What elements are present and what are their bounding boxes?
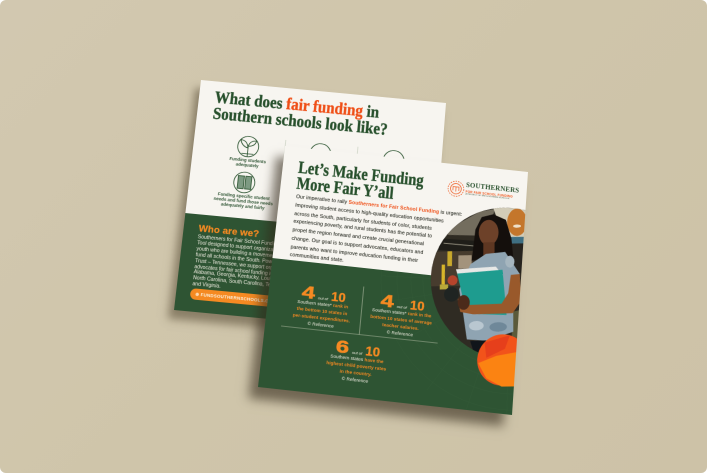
caption: funding specific student needs: Funding specific student: [218, 191, 270, 201]
intro paragraph: Our imperative to rally Southerners for Fair School Funding is urgent:: [296, 194, 462, 218]
description: [326, 353, 386, 384]
button: website link: ⊕ FUNDSOUTHERNSCHOOLS.ORG: [195, 292, 276, 304]
green lower section: [258, 258, 521, 415]
stat: 4 out of 10 expenditures: [292, 282, 350, 328]
description: per-student expenditures.: [293, 312, 350, 323]
number: [335, 336, 381, 360]
text: who are we body: fund all schools in the South. Power: [195, 252, 277, 265]
text: who are we body: [192, 234, 282, 290]
number: 6: [335, 336, 350, 357]
papers: [456, 266, 501, 276]
chart-like pattern, photo and orange circle: [281, 180, 526, 387]
intro paragraph: across the South, particularly for students of color, students: [294, 211, 432, 231]
panel: back card: [174, 80, 446, 334]
stat: 4 out of 10 salaries: [370, 290, 432, 337]
description: [292, 299, 350, 328]
folder: [457, 270, 507, 316]
description: in the country.: [339, 368, 372, 377]
number: out of: [352, 350, 362, 356]
description: © Reference: [307, 321, 334, 328]
caption: funding specific student needs: adequately and fairly: [221, 201, 265, 210]
caption: funding students adequately: adequately: [236, 161, 259, 168]
number: 10: [365, 343, 381, 360]
trousers: [470, 340, 486, 352]
icon: seedling: [237, 136, 260, 158]
number: out of: [318, 295, 328, 301]
heading: what does fair funding look like: What does fair funding in: [214, 87, 380, 122]
description: Southern states have the: [330, 353, 384, 364]
panel: front card: [258, 146, 528, 415]
text: who are we body: and Virginia.: [192, 281, 221, 290]
number: [301, 282, 346, 305]
face: [479, 220, 499, 245]
number: 10: [331, 289, 346, 305]
intro paragraph: [289, 194, 462, 264]
number: 10: [409, 298, 425, 314]
intro paragraph: change. Our goal is to support advocates, educators and: [291, 236, 424, 256]
intro paragraph: communities and state.: [289, 252, 344, 264]
number: [380, 290, 425, 314]
icon: documents: [233, 171, 256, 194]
description: teacher salaries.: [382, 322, 419, 331]
caption: funding specific student needs: [213, 191, 273, 210]
intro paragraph: parents who want to improve education funding in their: [290, 244, 418, 264]
heading: who are we: Who are we?: [198, 223, 260, 240]
stat: 6 out of 10 poverty: [326, 336, 386, 384]
hair: [472, 214, 513, 261]
intro paragraph: Improving student access to high-quality education opportunities: [295, 203, 444, 224]
text: who are we body: North Carolina, South Carolina, Tenn: [193, 275, 277, 289]
intro paragraph: experiencing poverty, and rural students has the potential to: [293, 219, 432, 240]
logo wordmark: A PROJECT OF THE SOUTHERN SCHOOLS: [465, 193, 509, 200]
description: Southern states* rank in the: [372, 307, 432, 319]
text: who are we body: advocates for fair school funding in: [194, 264, 273, 277]
description: the bottom 10 states in: [297, 306, 348, 316]
heading: let's make funding: More Fair Y’all: [296, 174, 394, 203]
description: highest child poverty rates: [326, 360, 386, 372]
text: who are we body: youth who are building a movement: [196, 246, 277, 259]
description: Southern states* rank in: [297, 299, 348, 309]
logo wordmark: [465, 182, 519, 200]
arm: [458, 274, 521, 315]
heading: what does fair funding look like: [212, 87, 388, 139]
text: who are we body: Southerners for Fair School Funding: [197, 234, 280, 248]
description: [370, 307, 432, 337]
caption: funding specific student needs: needs and fund those needs: [213, 196, 273, 206]
text: who are we body: Trust – Tennessee, we support organ: [195, 258, 279, 272]
logo wordmark: SOUTHERNERS: [466, 182, 519, 195]
icon: third funding icon: [382, 150, 405, 172]
number: out of: [397, 304, 407, 310]
caption: funding students adequately: Funding students: [229, 156, 266, 164]
intro paragraph: propel the region forward and create crucial generational: [292, 227, 424, 247]
logo emblem: [448, 180, 464, 197]
description: © Reference: [342, 376, 368, 384]
photo: student holding folder: [430, 208, 526, 352]
row dividers and icons: [233, 136, 404, 194]
caption: funding students adequately: [229, 156, 266, 168]
divider lines: [281, 278, 441, 343]
icon: second funding icon: [309, 143, 332, 165]
text: who are we body: Alabama, Georgia, Kentucky, Louisian: [193, 270, 280, 284]
text: who are we body: Tool designed to support organization: [197, 240, 282, 254]
shirt: [459, 252, 520, 341]
number: 4: [380, 290, 395, 311]
button: website link: [190, 288, 312, 311]
heading: let's make funding: Let’s Make Funding: [297, 159, 424, 191]
logo wordmark: FOR FAIR SCHOOL FUNDING: [465, 189, 513, 198]
number: 4: [301, 282, 316, 303]
green footer band: [174, 213, 436, 334]
heading: what does fair funding look like: Southern schools look like?: [212, 103, 388, 139]
orange circle accent: [477, 334, 528, 387]
description: © Reference: [387, 329, 413, 337]
description: bottom 10 states of average: [370, 314, 432, 325]
